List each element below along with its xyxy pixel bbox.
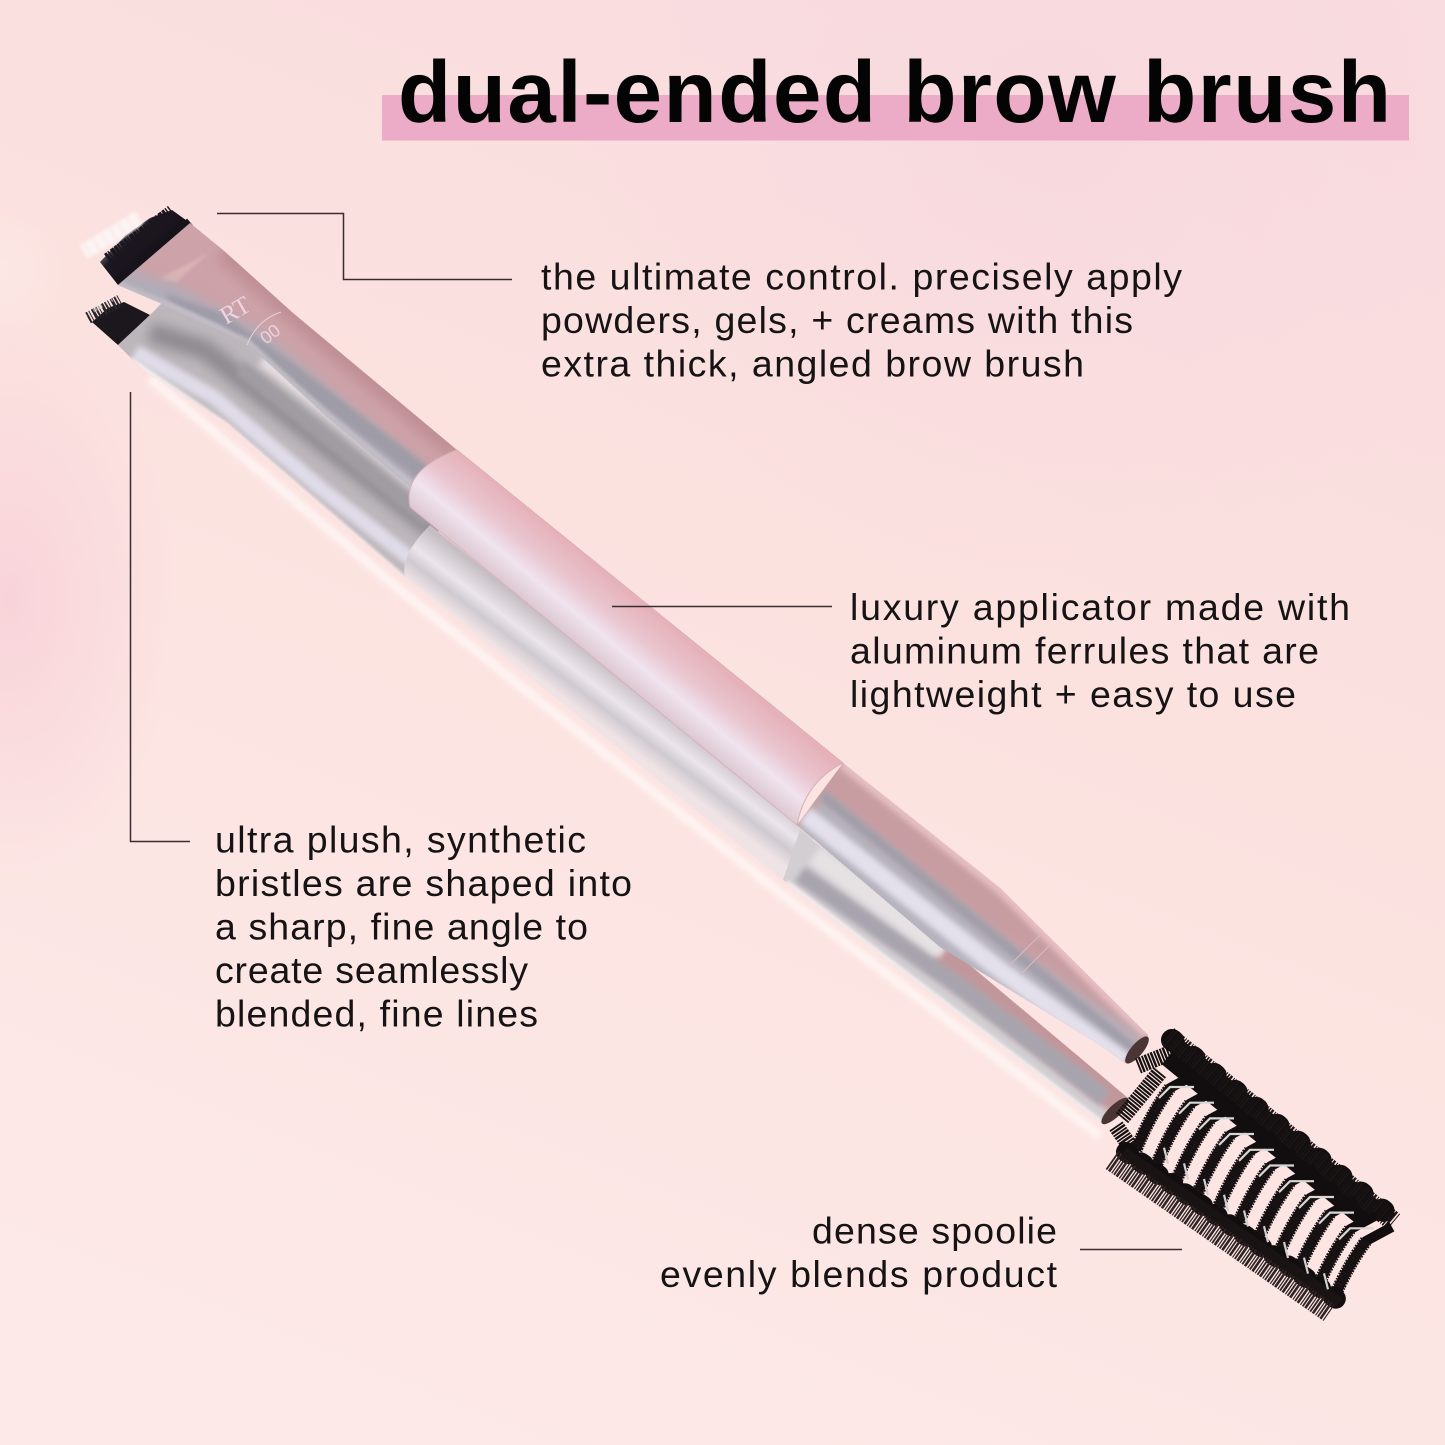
heading: dual-ended brow brush xyxy=(382,44,1409,141)
leader line: spoolie callout xyxy=(1080,1248,1182,1250)
spoolie twisted wire xyxy=(1159,1087,1374,1289)
heading text: dual-ended brow brush xyxy=(398,44,1391,141)
callout: aluminum ferrules: aluminum ferrules that are xyxy=(850,630,1319,672)
front tip end xyxy=(1121,1033,1153,1067)
front metal ferrule, spoolie end xyxy=(797,764,1148,1063)
callout: angled brow brush: powders, gels, + creams with this xyxy=(541,299,1133,341)
spoolie root tufts joining the brushes xyxy=(1116,1050,1178,1152)
white reflection beneath rear brush xyxy=(150,378,1100,1136)
rear tip end xyxy=(1098,1094,1132,1128)
callout: synthetic bristles: ultra plush, synthetic xyxy=(215,818,586,860)
callout: angled brow brush: extra thick, angled brow brush xyxy=(541,342,1084,384)
callout: synthetic bristles: a sharp, fine angle to xyxy=(215,906,588,948)
illustration: two dual-ended brushes xyxy=(84,200,1394,1312)
front brand mark: 00 xyxy=(256,320,284,348)
heading highlight bar xyxy=(382,95,1409,140)
spoolie lower tuft row xyxy=(1112,1152,1342,1312)
callout: angled brow brush: the ultimate control. precisely apply xyxy=(541,256,1182,298)
dense spoolie bristles xyxy=(1112,1036,1394,1312)
callout: aluminum ferrules: luxury applicator made with xyxy=(850,586,1350,628)
front brand mark xyxy=(216,292,284,348)
leader line: bristles callout xyxy=(130,392,190,842)
front iridescent handle xyxy=(409,450,843,825)
callout: aluminum ferrules: lightweight + easy to use xyxy=(850,673,1296,715)
rear iridescent handle xyxy=(404,525,815,880)
callout: synthetic bristles: create seamlessly xyxy=(215,949,528,991)
front brush xyxy=(84,200,1160,1070)
front angled bristles xyxy=(84,210,190,285)
callout: dense spoolie: evenly blends product xyxy=(660,1253,1058,1295)
leader line: ferrule callout xyxy=(612,606,832,608)
leader line: brow brush callout xyxy=(217,214,512,280)
spoolie upper tuft row xyxy=(1168,1036,1394,1222)
rear angled bristles xyxy=(85,299,150,345)
rear metal ferrule, brow end xyxy=(118,304,438,577)
spoolie chevron ribs xyxy=(1136,1074,1392,1303)
callout: synthetic bristles: bristles are shaped into xyxy=(215,862,632,904)
front metal ferrule, brow end xyxy=(118,223,456,488)
callout: synthetic bristles: blended, fine lines xyxy=(215,992,538,1034)
front brand mark: RT xyxy=(216,292,255,330)
rear metal ferrule, spoolie end xyxy=(783,830,1128,1122)
callout: dense spoolie: dense spoolie xyxy=(812,1210,1057,1252)
rear brush xyxy=(85,290,1140,1140)
